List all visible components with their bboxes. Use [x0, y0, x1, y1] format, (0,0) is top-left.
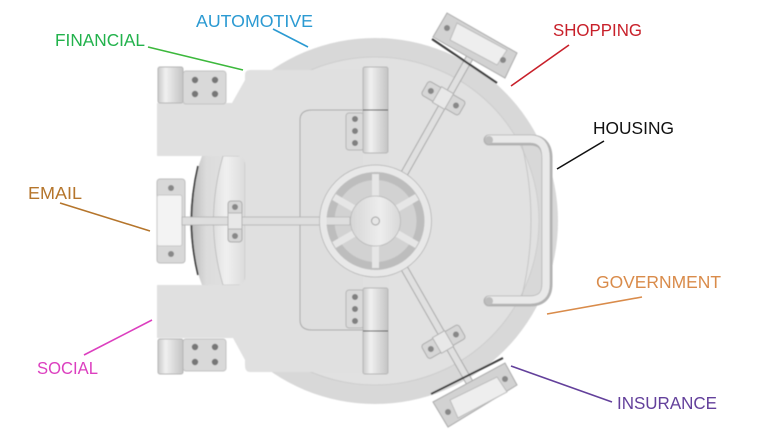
upper right locking bar: [395, 57, 470, 190]
bottom left hinge: [158, 339, 226, 374]
left side disc behind plate: [190, 156, 245, 285]
top centre hinge: [346, 67, 388, 153]
left latch: [157, 179, 185, 263]
label: financial: [55, 30, 243, 70]
label: insurance: INSURANCE: [617, 393, 717, 413]
label: social: [37, 320, 152, 378]
label: insurance: [511, 366, 717, 413]
door handle: [485, 136, 547, 305]
recessed centre panel: [300, 110, 363, 330]
label: housing: [557, 118, 674, 169]
label: financial: FINANCIAL: [55, 30, 145, 50]
label: shopping: SHOPPING: [553, 20, 642, 40]
label: email: EMAIL: [28, 183, 82, 203]
top left hinge: [158, 67, 226, 104]
label: government: [547, 272, 721, 314]
outer door disc: [192, 38, 558, 404]
label: government: GOVERNMENT: [596, 272, 721, 292]
label: social: SOCIAL: [37, 358, 98, 378]
inner door disc: [211, 57, 539, 385]
hinge plate: [157, 70, 388, 372]
label: shopping: [511, 20, 642, 86]
lower right locking bar: [395, 252, 471, 385]
vault door illustration: [157, 13, 558, 427]
left locking bar: [182, 201, 324, 242]
lower right clamp: [431, 358, 517, 427]
bottom centre hinge: [346, 288, 388, 374]
label: automotive: AUTOMOTIVE: [196, 11, 313, 31]
label: automotive: [196, 11, 313, 47]
spoked wheel: [320, 165, 432, 277]
upper right clamp: [432, 13, 517, 83]
label: email: [28, 183, 150, 231]
label: housing: HOUSING: [593, 118, 674, 138]
